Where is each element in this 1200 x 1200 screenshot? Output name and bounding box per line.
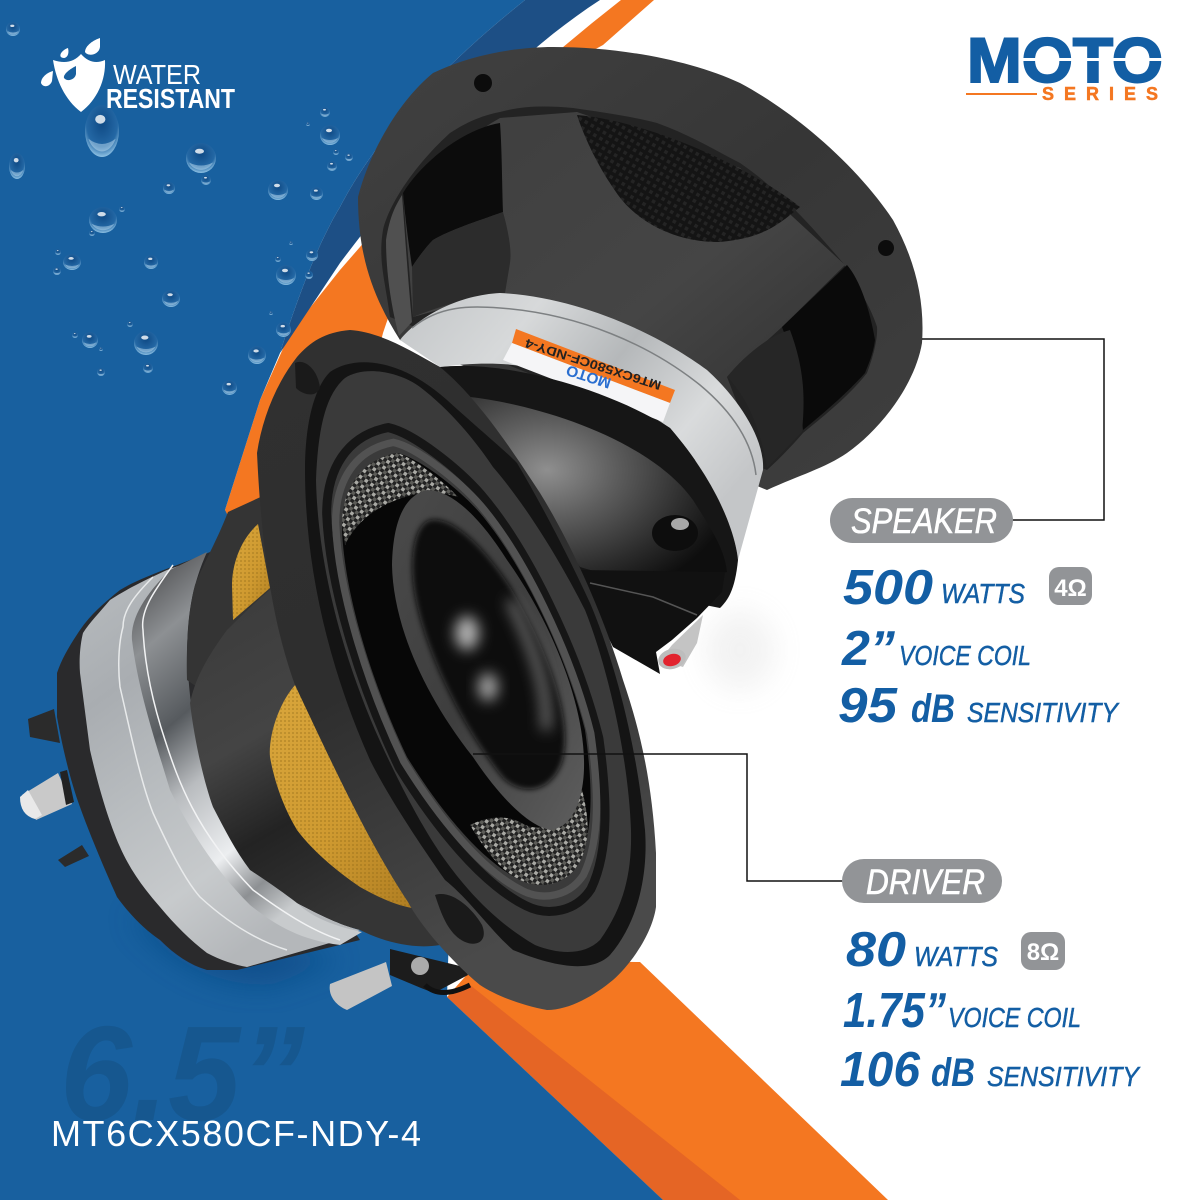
500 watts (843, 561, 1025, 615)
magnet dome (470, 397, 727, 580)
left rim highlight (386, 195, 412, 336)
flange inner rim (381, 107, 877, 470)
resistant label: RESISTANT (106, 83, 235, 114)
icon: shield with drops (41, 38, 105, 112)
logo orange rule (966, 93, 1037, 95)
4 ohm badge: 4Ω (1054, 575, 1087, 602)
95 dB sensitivity (838, 679, 1120, 733)
500 watts: WATTS (941, 578, 1025, 609)
silver magnet band (80, 563, 360, 967)
lower basket (190, 587, 440, 946)
moto series logo (966, 26, 1163, 104)
1.75 inch voice coil: VOICE COIL (948, 1002, 1081, 1033)
speaker soft shadow (705, 610, 775, 690)
top window (577, 115, 800, 242)
front flange (257, 330, 656, 1010)
8 ohm badge: 8Ω (1027, 939, 1059, 966)
1.75 inch voice coil (843, 984, 1081, 1038)
95 dB sensitivity: dB (911, 687, 955, 731)
1.75 inch voice coil: 1.75” (843, 984, 946, 1038)
106 dB sensitivity: 106 (840, 1043, 921, 1097)
back tabs (28, 709, 89, 867)
speaker pill: SPEAKER (851, 502, 997, 541)
flange inner groove (305, 362, 646, 966)
dust cap (392, 490, 584, 830)
80 watts: 80 (846, 923, 906, 977)
bolt (652, 515, 698, 551)
ring label (503, 329, 675, 422)
right bolt hole (878, 240, 894, 256)
terminal bracket (580, 570, 725, 674)
carbon weave bottom (470, 790, 588, 885)
water resistant badge (41, 38, 235, 114)
cone (342, 453, 591, 885)
magnet black band (440, 366, 738, 608)
4 ohm badge (1049, 567, 1092, 605)
background: dark blue band (280, 0, 600, 353)
red terminal (656, 615, 703, 672)
106 dB sensitivity: SENSITIVITY (987, 1061, 1141, 1092)
2 inch voice coil: VOICE COIL (899, 640, 1031, 671)
model number: MT6CX580CF-NDY-4 (51, 1113, 421, 1154)
lower-left inner cone (412, 212, 511, 317)
panel: speaker specs (830, 498, 1120, 733)
glossy band (132, 552, 362, 945)
106 dB sensitivity (840, 1043, 1141, 1097)
magnet shadow (130, 915, 340, 985)
water label: WATER (113, 59, 201, 90)
80 watts (846, 923, 998, 977)
left connector top (20, 770, 74, 820)
logo series: SERIES (1042, 84, 1158, 104)
driver pill: DRIVER (866, 863, 985, 902)
callout line: driver (473, 754, 843, 881)
background: orange swoosh (225, 0, 888, 1200)
95 dB sensitivity: SENSITIVITY (967, 697, 1120, 728)
surround ridge (336, 442, 597, 896)
ring grooves (119, 565, 340, 950)
95 dB sensitivity: 95 (838, 679, 898, 733)
right window (782, 265, 875, 430)
callout line: speaker (922, 339, 1104, 520)
logo wordmark: MOTO (967, 26, 1163, 96)
flange screw (435, 894, 484, 944)
size watermark: 6.5” (60, 998, 305, 1149)
500 watts: 500 (843, 561, 933, 615)
yellow fabric upper (232, 524, 270, 620)
speaker bolt hole (474, 74, 492, 92)
2 inch voice coil (841, 622, 1031, 676)
speaker flange (358, 47, 923, 490)
background: blue field (0, 0, 663, 1200)
ring label: MOTO (564, 361, 613, 391)
yellow fabric lower (270, 683, 412, 908)
bottom speaker (20, 330, 656, 1010)
upper basket arm (187, 495, 290, 687)
surround groove (327, 428, 605, 911)
panel: driver specs (840, 859, 1141, 1097)
water droplets (6, 22, 353, 395)
ring groove (412, 307, 756, 475)
top speaker (358, 47, 923, 690)
ring label: MT6CX580CF-NDY-4 (523, 336, 663, 392)
80 watts: WATTS (914, 941, 998, 972)
right inner cone (727, 330, 804, 468)
right connector (330, 949, 470, 1010)
basket body (403, 112, 845, 470)
106 dB sensitivity: dB (931, 1051, 975, 1095)
8 ohm badge (1021, 932, 1065, 970)
back plate (57, 552, 360, 970)
2 inch voice coil: 2” (841, 622, 895, 676)
carbon weave top (342, 453, 458, 545)
silver magnet ring (400, 293, 763, 560)
bracket top edge (590, 583, 697, 615)
left window (403, 123, 503, 267)
foam surround (316, 371, 631, 952)
